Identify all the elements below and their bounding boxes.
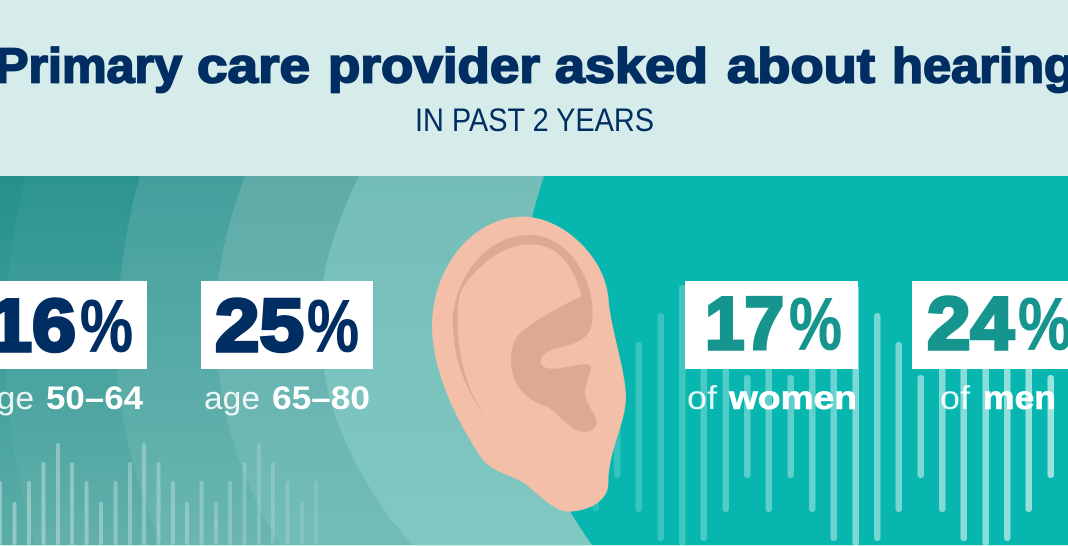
title: hearing: [892, 40, 1068, 94]
stat: 24% of men: men: [983, 379, 1056, 416]
title: asked: [555, 40, 708, 94]
stat: 16% age 50–64: [0, 281, 147, 416]
decorative bottom edge: [0, 545, 1068, 546]
stat: 16% age 50–64: 50–64: [46, 380, 143, 416]
stat: 24% of men: of: [940, 379, 971, 416]
title: care: [197, 40, 310, 94]
stat: 16% age 50–64: %: [80, 284, 133, 368]
stat: 24% of men: [912, 281, 1068, 416]
panel: sound wave arcs: [0, 176, 592, 545]
header panel: [0, 0, 1068, 176]
stat: 17% of women: women: [728, 379, 857, 416]
stat: 24% of men: 24: [927, 282, 1014, 365]
stat: 25% age 65–80: 25: [215, 284, 304, 367]
left waveform bars: [0, 443, 318, 545]
title: about: [727, 40, 875, 94]
stat: 25% age 65–80: [201, 281, 373, 416]
right waveform bars: [592, 285, 1068, 546]
subtitle: IN PAST 2 YEARS: [415, 102, 654, 138]
stat: 25% age 65–80: age: [204, 380, 260, 416]
icon: ear: [432, 217, 626, 512]
title: provider: [328, 40, 540, 94]
stat: 17% of women: 17: [705, 282, 784, 365]
stat: 17% of women: [685, 281, 858, 416]
stat: 25% age 65–80: 65–80: [272, 380, 370, 416]
title: [0, 40, 1068, 94]
stat: 25% age 65–80: %: [307, 284, 359, 368]
title: Primary: [0, 40, 182, 94]
stat: 17% of women: %: [789, 282, 842, 366]
panel: teal background: [0, 176, 1068, 545]
stat: 17% of women: of: [687, 379, 718, 416]
